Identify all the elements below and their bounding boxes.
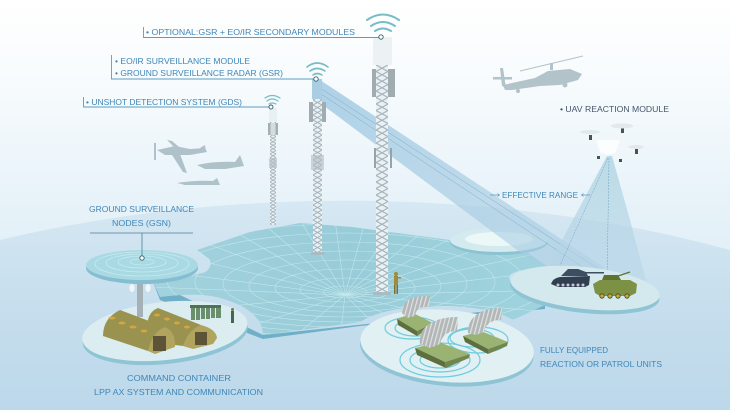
tower 1: gunshot detection	[268, 108, 278, 225]
terrain map with grid	[154, 223, 547, 339]
wifi icon: tower 3	[367, 14, 399, 31]
label: EO/IR and radar: • GROUND SURVEILLANCE RADAR (GSR)	[115, 68, 283, 78]
rear tent	[148, 308, 217, 349]
green armoured vehicle	[593, 272, 637, 298]
label: optional modules: • OPTIONAL:GSR + EO/IR SECONDARY MODULES	[146, 27, 355, 37]
ground plane	[0, 201, 730, 410]
label: command container: LPP AX SYSTEM AND COMMUNICATION	[94, 387, 263, 397]
UAV target disc	[508, 259, 662, 321]
helicopter	[493, 56, 583, 93]
beam: drone camera cone	[545, 156, 650, 296]
tower 2: radar and EO/IR	[309, 79, 326, 255]
reaction units disc	[357, 303, 537, 393]
wifi icon: tower 2	[307, 63, 328, 75]
label: effective range with arrows: EFFECTIVE RANGE	[502, 190, 578, 200]
radar vehicle front	[415, 317, 470, 368]
label: UAV reaction module: • UAV REACTION MODULE	[560, 104, 669, 114]
tower 3: optional secondary modules	[372, 37, 395, 295]
label: reaction units: REACTION OR PATROL UNITS	[540, 359, 662, 369]
label: EO/IR and radar: • EO/IR SURVEILLANCE MODULE	[115, 56, 250, 66]
wifi icon: tower 1	[265, 96, 280, 104]
label: gunshot detection	[84, 97, 273, 109]
beam: tower radar effective range	[312, 78, 605, 282]
front tent	[103, 310, 175, 354]
GSN disc	[86, 250, 198, 284]
soldier beside tower	[394, 272, 401, 294]
command container disc	[79, 293, 251, 373]
label: reaction units: FULLY EQUIPPED	[540, 345, 608, 355]
label: ground surveillance nodes: NODES (GSN)	[112, 218, 171, 228]
helipad disc	[450, 228, 548, 255]
label: command container: COMMAND CONTAINER	[127, 373, 231, 383]
label: gunshot detection: • UNSHOT DETECTION SYSTEM (GDS)	[86, 97, 242, 107]
label: ground surveillance nodes	[89, 204, 194, 260]
fighter planes	[154, 140, 244, 185]
radar vehicle right	[463, 308, 508, 354]
label: command container	[94, 373, 263, 397]
comm mast with antennas	[130, 283, 150, 317]
command tents	[103, 308, 217, 354]
label: ground surveillance nodes: GROUND SURVEILLANCE	[89, 204, 194, 214]
radar vehicles with ripple signals	[385, 296, 508, 377]
dark tank	[551, 269, 604, 287]
drone	[580, 124, 644, 162]
label: optional modules	[144, 27, 383, 39]
troop formation	[190, 305, 234, 323]
label: EO/IR and radar	[112, 55, 318, 81]
radar vehicle left	[397, 296, 433, 336]
label: reaction units	[540, 345, 662, 369]
